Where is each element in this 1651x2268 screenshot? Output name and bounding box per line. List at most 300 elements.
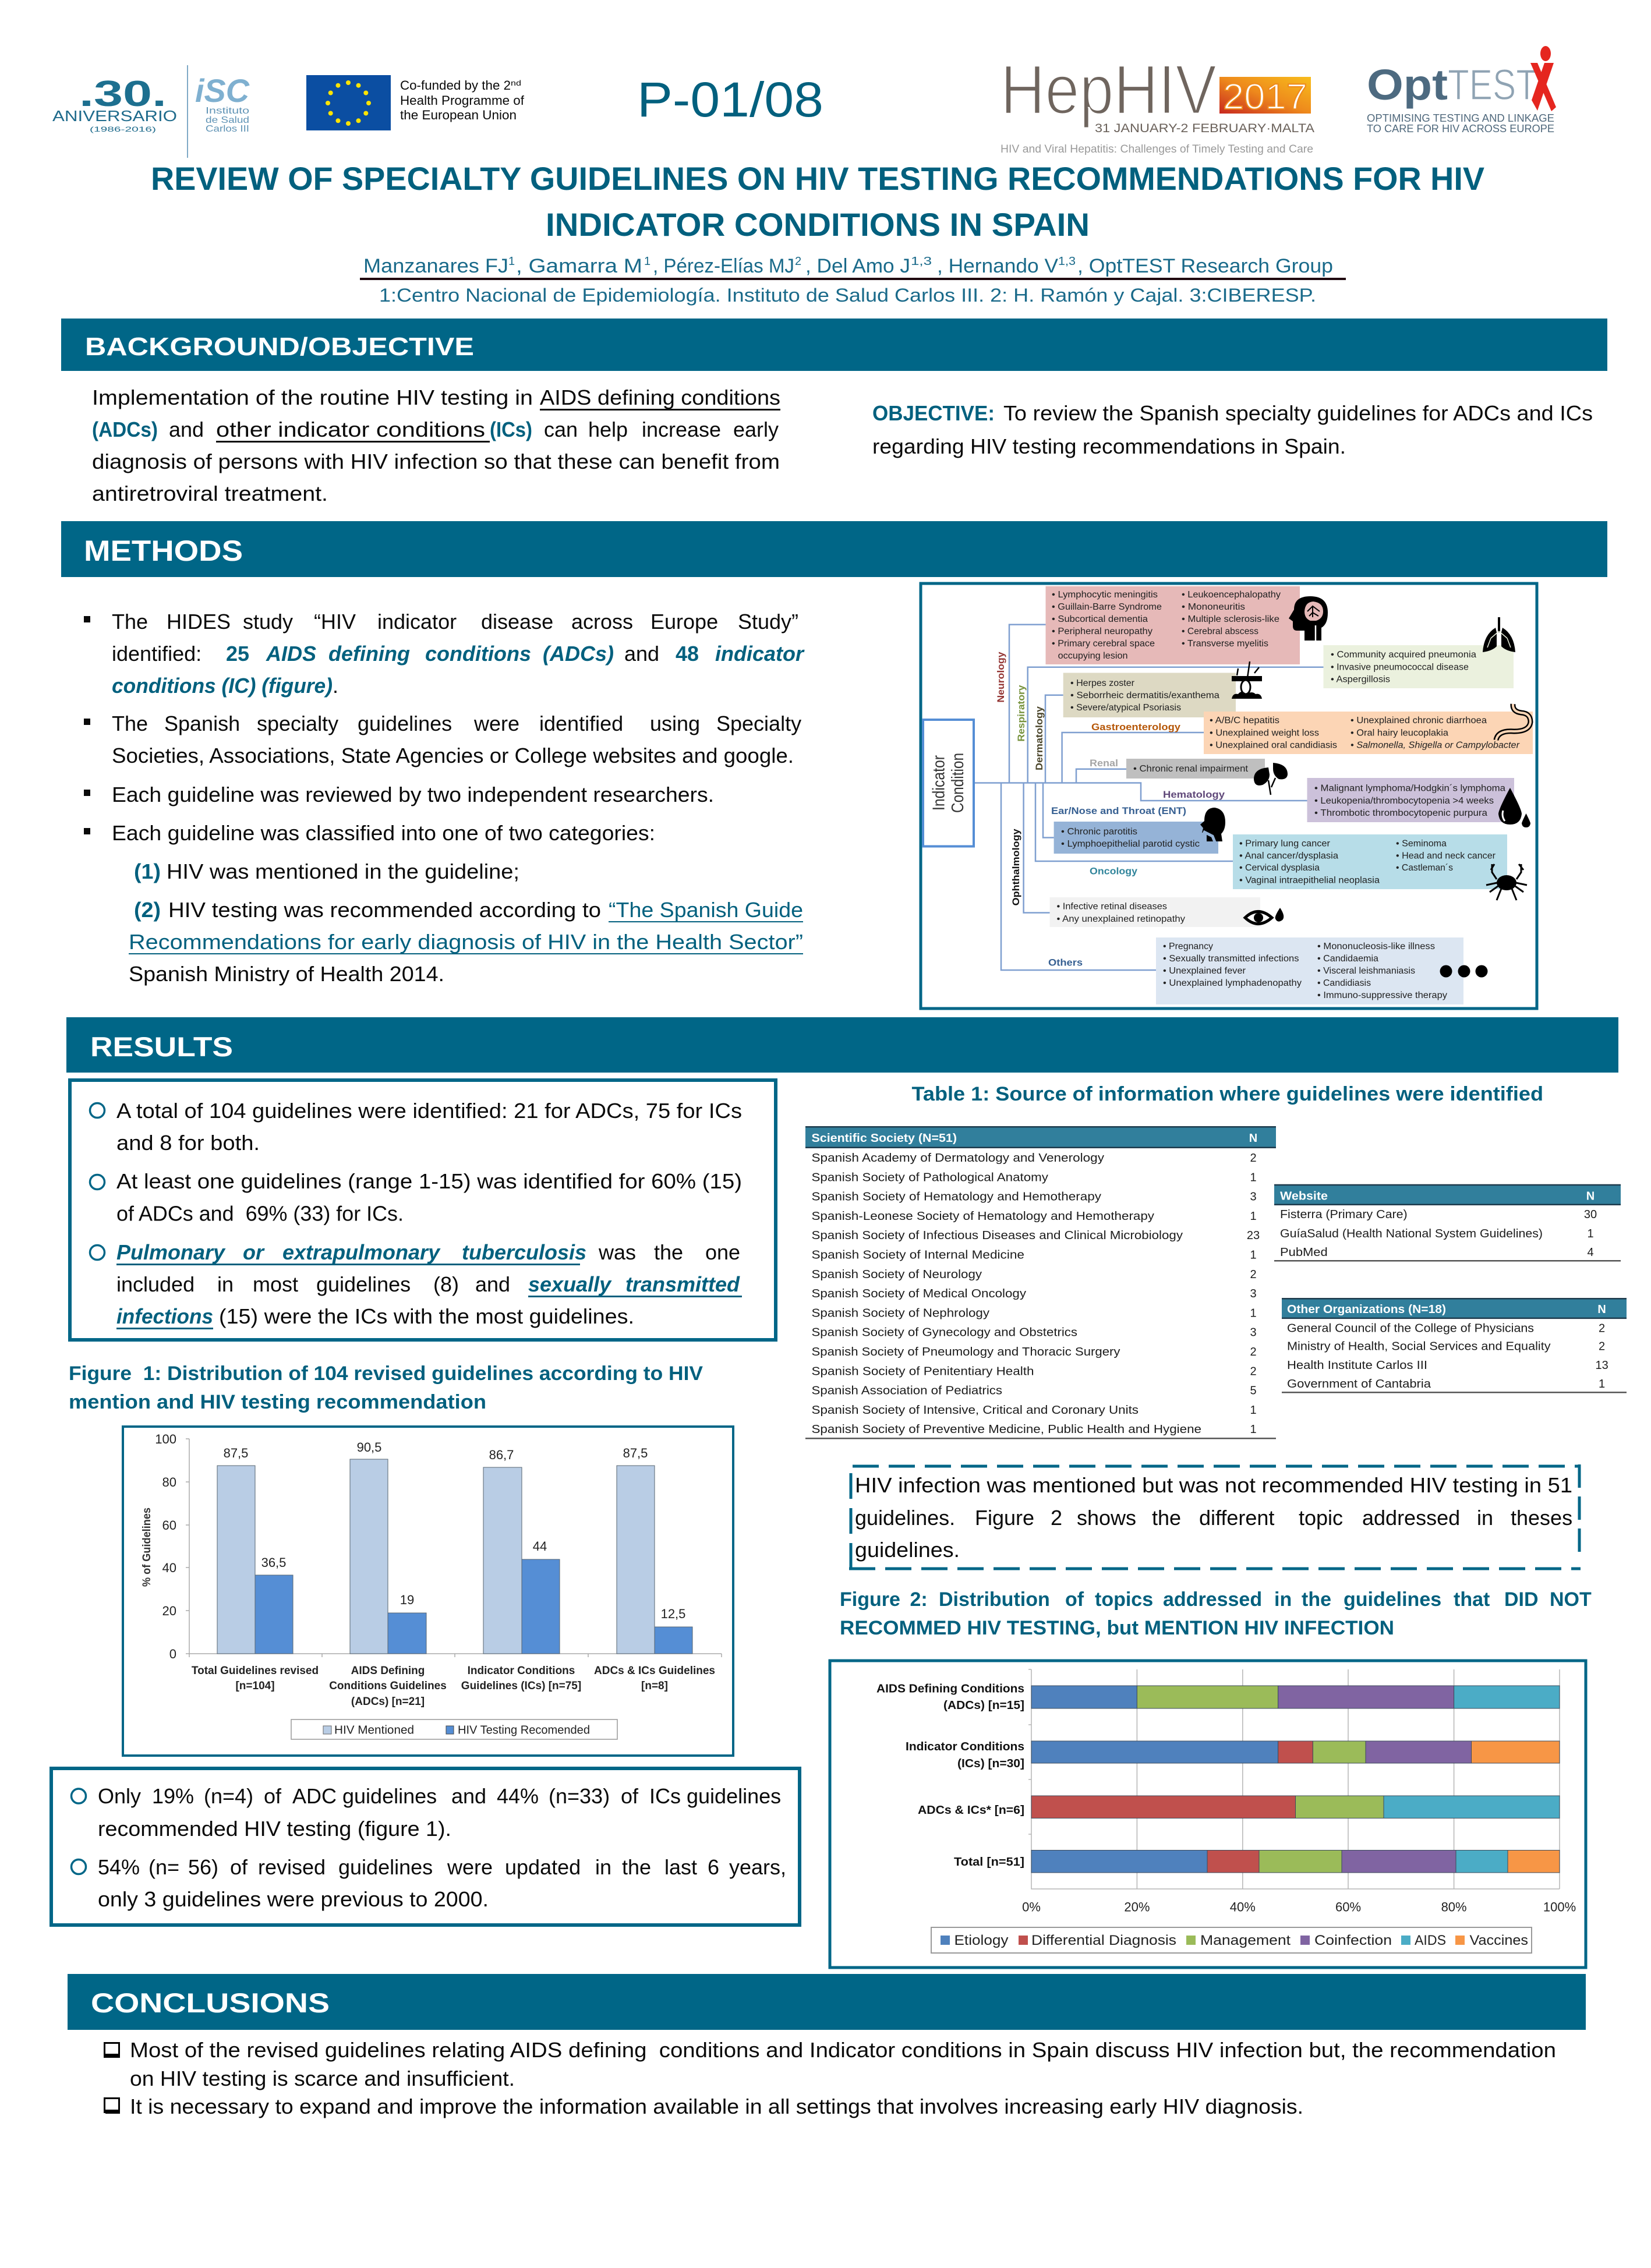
box: renal: • Chronic renal impairment <box>1133 764 1249 774</box>
table: other organizations: Health Institute Carlos III <box>1287 1359 1427 1372</box>
panel: results second findings: (n=4) <box>204 1784 253 1808</box>
co-funded text: nd <box>511 79 521 87</box>
category labels: Ophthalmology <box>1010 829 1021 905</box>
box: neurology: • Cerebral abscess <box>1182 627 1258 636</box>
figure 2 heading: NOT <box>1550 1588 1592 1611</box>
table: scientific society: Spanish Society of Penitentiary Health <box>812 1365 1034 1378</box>
box: neurology: • Subcortical dementia <box>1052 614 1148 624</box>
legend: HIV Testing Recomended <box>458 1724 590 1736</box>
text block: conclusions <box>105 2038 1556 2118</box>
box: oncology: • Anal cancer/dysplasia <box>1239 851 1338 861</box>
panel: results key findings: and <box>475 1272 510 1296</box>
panel: results second findings: updated <box>505 1855 581 1879</box>
y axis: % of Guidelines <box>141 1508 153 1587</box>
text block: methods list: using <box>650 712 700 735</box>
text block: methods list: (1) <box>134 859 161 883</box>
co-funded text <box>400 78 525 122</box>
y axis: 40 <box>162 1561 176 1575</box>
panel: results key findings: sexually <box>528 1272 612 1296</box>
value labels: 90,5 <box>357 1440 381 1455</box>
category labels: Ear/Nose and Throat (ENT) <box>1051 805 1186 816</box>
panel: results second findings: years, <box>729 1855 786 1879</box>
panel: results key findings: tuberculosis <box>462 1240 586 1264</box>
callout: dashed note: Figure <box>975 1506 1034 1530</box>
table: scientific society: 1 <box>1250 1210 1257 1223</box>
panel: results second findings: only 3 guidelines were previous to 2000. <box>98 1887 489 1911</box>
logo: OptTEST: OPTIMISING TESTING AND LINKAGE <box>1367 112 1554 124</box>
icon: lungs <box>1483 617 1515 652</box>
icon: blood drops <box>1498 788 1530 827</box>
box: ENT: • Chronic parotitis <box>1061 827 1137 837</box>
text block: methods list: Study” <box>738 610 798 634</box>
legend <box>931 1927 1532 1953</box>
category labels: Renal <box>1090 758 1118 769</box>
legend: AIDS <box>1415 1933 1446 1948</box>
box: gastroenterology: • Oral hairy leucoplakia <box>1351 728 1448 738</box>
chart: figure 1 bar chart <box>123 1427 733 1756</box>
box: gastroenterology: • Unexplained chronic diarrhoea <box>1351 716 1487 726</box>
table: scientific society: Spanish Society of Pathological Anatomy <box>812 1171 1048 1184</box>
box: gastroenterology: • Unexplained weight loss <box>1210 728 1319 738</box>
row labels: ADCs & ICs* [n=6] <box>918 1804 1024 1817</box>
text block: methods list: Specialty <box>716 712 801 735</box>
panel: results second findings: (n= <box>149 1855 179 1879</box>
logo: ISCIII 30 anniversary <box>52 65 250 158</box>
figure 2 heading: that <box>1454 1588 1490 1611</box>
x axis labels: 60% <box>1335 1899 1361 1915</box>
category labels: AIDS Defining <box>351 1665 425 1677</box>
text block: methods list: study <box>243 610 293 634</box>
logo: OptTEST: TO CARE FOR HIV ACROSS EUROPE <box>1367 123 1554 135</box>
table: other organizations: 2 <box>1599 1340 1605 1353</box>
panel: results second findings: were <box>447 1855 493 1879</box>
box: oncology: • Castleman´s <box>1396 863 1453 873</box>
box: oncology: • Primary lung cancer <box>1239 838 1330 849</box>
icon: crab <box>1486 864 1527 900</box>
panel: results second findings <box>51 1768 800 1925</box>
text block: conclusions: on HIV testing is scarce and insufficient. <box>130 2067 515 2090</box>
text block: methods list: (ADCs) <box>543 642 614 666</box>
icon: head with brain <box>1289 596 1328 641</box>
x axis labels: 0% <box>1022 1899 1041 1915</box>
logo: HepHIV 2017: 2017 <box>1223 77 1307 117</box>
category labels: Respiratory <box>1016 685 1027 742</box>
figure 2 heading: addressed <box>1163 1588 1262 1611</box>
box: oncology <box>1233 834 1507 889</box>
category labels: Gastroenterology <box>1091 721 1181 733</box>
heading: conclusions <box>68 1974 1586 2030</box>
figure 1 heading: Figure 1: Distribution of 104 revised guidelines according to HIV <box>69 1363 703 1385</box>
text block: methods list: Spanish <box>164 712 240 735</box>
box: neurology: occupying lesion <box>1058 651 1128 661</box>
table: other organizations: 1 <box>1599 1378 1605 1390</box>
box: others: • Mononucleosis-like illness <box>1317 942 1435 951</box>
table: scientific society: 3 <box>1250 1326 1257 1339</box>
panel: results second findings: 6 <box>708 1855 719 1879</box>
figure 2 heading: DID <box>1504 1588 1539 1611</box>
x axis labels: 100% <box>1543 1899 1576 1915</box>
box: oncology: • Seminoma <box>1396 838 1447 849</box>
box: respiratory: • Community acquired pneumonia <box>1331 650 1476 660</box>
table: website: GuíaSalud (Health National System Guidelines) <box>1280 1227 1543 1240</box>
panel: results second findings: guidelines <box>687 1784 781 1808</box>
text block: methods list: disease <box>481 610 553 634</box>
logo: ISCIII 30 anniversary: Instituto <box>206 106 249 116</box>
panel: results key findings: (15) were the ICs with the most guidelines. <box>219 1304 634 1328</box>
category labels: Total Guidelines revised <box>192 1665 319 1677</box>
category labels <box>192 1665 715 1708</box>
text block: methods list: defining <box>328 642 410 666</box>
box: ophthalmology <box>1049 897 1260 927</box>
category labels: Dermatology <box>1034 706 1045 770</box>
affiliations: 1:Centro Nacional de Epidemiología. Instituto de Salud Carlos III. 2: H. Ramón y Cajal. 3:CIBERESP. <box>379 285 1316 306</box>
table: other organizations: N <box>1597 1303 1606 1316</box>
text block: methods list: were <box>473 712 519 735</box>
box: gastroenterology <box>1204 712 1533 754</box>
panel: results key findings: Pulmonary <box>116 1240 226 1264</box>
box: others: • Unexplained fever <box>1163 966 1246 976</box>
text block: methods list: HIV was mentioned in the guideline; <box>167 859 519 883</box>
text block: objective: OBJECTIVE: <box>872 401 995 425</box>
text block: methods list: and <box>624 642 659 666</box>
y axis: 80 <box>162 1475 176 1489</box>
table: website: N <box>1586 1190 1595 1203</box>
panel: results key findings: included <box>116 1272 195 1296</box>
panel: results second findings: of <box>264 1784 282 1808</box>
icon: stomach <box>1496 704 1530 740</box>
figure 1 heading: mention and HIV testing recommendation <box>69 1391 486 1413</box>
text block: methods list: identified: <box>112 642 201 666</box>
table: other organizations: General Council of the College of Physicians <box>1287 1322 1534 1335</box>
figure 2 heading: in <box>1274 1588 1292 1611</box>
table: scientific society: Spanish Society of Pneumology and Thoracic Surgery <box>812 1346 1120 1358</box>
box: dermatology: • Herpes zoster <box>1070 678 1134 688</box>
x axis labels: 40% <box>1230 1899 1256 1915</box>
legend: Etiology <box>954 1933 1009 1948</box>
box: dermatology: • Severe/atypical Psoriasis <box>1070 703 1181 713</box>
box: others: • Immuno-suppressive therapy <box>1317 990 1447 1000</box>
table: scientific society: 2 <box>1250 1365 1257 1378</box>
panel: results second findings: of <box>621 1784 639 1808</box>
value labels: 36,5 <box>261 1555 286 1570</box>
value labels: 19 <box>400 1593 414 1607</box>
logo: ISCIII 30 anniversary: (1986-2016) <box>90 125 156 133</box>
box: others: • Sexually transmitted infections <box>1163 954 1299 964</box>
chart: figure 2 stacked bars <box>830 1661 1586 1968</box>
authors <box>360 255 1346 280</box>
table: website: PubMed <box>1280 1246 1328 1259</box>
box: neurology: • Multiple sclerosis-like <box>1182 614 1279 624</box>
table: scientific society: N <box>1249 1132 1257 1145</box>
table: scientific society: Spanish Society of Infectious Diseases and Clinical Microbiology <box>812 1229 1183 1242</box>
table: scientific society: 1 <box>1250 1404 1257 1417</box>
table: other organizations: Government of Cantabria <box>1287 1378 1431 1390</box>
panel: results key findings: most <box>253 1272 298 1296</box>
panel: results second findings: of <box>230 1855 248 1879</box>
table: scientific society: 2 <box>1250 1268 1257 1281</box>
y axis <box>141 1432 176 1661</box>
figure 2 heading: the <box>1302 1588 1331 1611</box>
table: scientific society: Spanish Society of Preventive Medicine, Public Health and Hygiene <box>812 1423 1201 1436</box>
authors: , Del Amo J <box>805 255 910 277</box>
table: scientific society: 3 <box>1250 1287 1257 1300</box>
panel: results second findings: 19% <box>152 1784 194 1808</box>
table: other organizations: 2 <box>1599 1322 1605 1335</box>
table: scientific society: 2 <box>1250 1152 1257 1165</box>
callout: dashed note: guidelines. <box>855 1538 960 1562</box>
table: scientific society: Spanish Society of Hematology and Hemotherapy <box>812 1191 1101 1204</box>
text block: methods list: The <box>112 712 148 735</box>
table: scientific society: Scientific Society (N=51) <box>812 1132 957 1145</box>
text block: objective: regarding HIV testing recommendations in Spain. <box>872 434 1346 458</box>
panel: results second findings: Only <box>98 1784 141 1808</box>
row labels <box>876 1683 1024 1869</box>
box: dermatology: • Seborrheic dermatitis/exanthema <box>1070 691 1219 700</box>
logo: ISCIII 30 anniversary: .30. <box>79 74 167 114</box>
panel: results key findings: guidelines <box>316 1272 411 1296</box>
text block: background: antiretroviral treatment. <box>92 482 328 505</box>
callout: dashed note: the <box>1152 1506 1181 1530</box>
panel: results key findings: one <box>705 1240 740 1264</box>
panel: results second findings: guidelines <box>342 1784 437 1808</box>
text block: methods list: indicator <box>715 642 805 666</box>
row labels: (ADCs) [n=15] <box>943 1699 1024 1712</box>
text block: methods list: identified <box>539 712 623 735</box>
logo: ISCIII 30 anniversary: Carlos III <box>206 124 249 134</box>
row labels: AIDS Defining Conditions <box>876 1683 1024 1696</box>
row labels: (ICs) [n=30] <box>957 1757 1024 1770</box>
category labels: Oncology <box>1090 865 1138 877</box>
logo: HepHIV 2017: 31 JANUARY-2 FEBRUARY·MALTA <box>1095 122 1314 135</box>
callout: dashed note: HIV infection was mentioned but was not recommended HIV testing in 51 <box>855 1473 1572 1497</box>
callout: dashed note: theses <box>1511 1506 1572 1530</box>
category labels: Hematology <box>1163 789 1225 800</box>
panel: results second findings: ICs <box>649 1784 681 1808</box>
panel: results key findings: transmitted <box>625 1272 740 1296</box>
figure: indicator condition diagram <box>921 583 1537 1009</box>
row labels: Total [n=51] <box>954 1856 1024 1869</box>
table: scientific society: 1 <box>1250 1171 1257 1184</box>
table: scientific society: 2 <box>1250 1346 1257 1358</box>
logo: ISCIII 30 anniversary: de Salud <box>206 115 249 125</box>
value labels: 86,7 <box>489 1448 514 1462</box>
text block: methods list: Recommendations for early diagnosis of HIV in the Health Sector” <box>129 930 803 954</box>
title: REVIEW OF SPECIALTY GUIDELINES ON HIV TESTING RECOMMENDATIONS FOR HIV <box>151 160 1484 197</box>
table: other organizations: 13 <box>1595 1359 1608 1372</box>
x axis labels <box>1022 1899 1576 1915</box>
table: scientific society: Spanish Society of Intensive, Critical and Coronary Units <box>812 1404 1139 1417</box>
box: respiratory: • Aspergillosis <box>1331 674 1390 685</box>
heading: background/objective: BACKGROUND/OBJECTIVE <box>85 332 474 361</box>
box: ophthalmology: • Any unexplained retinopathy <box>1056 914 1185 924</box>
panel: results key findings: A total of 104 guidelines were identified: 21 for ADCs, 75 for ICs <box>116 1099 742 1123</box>
figure 2 heading: topics <box>1095 1588 1153 1611</box>
box: others: • Pregnancy <box>1163 942 1213 951</box>
co-funded text: Health Programme of <box>400 93 525 108</box>
text block: methods list: (2) <box>134 898 161 922</box>
panel: results key findings: or <box>243 1240 265 1264</box>
panel: results second findings: 54% <box>98 1855 140 1879</box>
text block: background: early <box>733 417 779 441</box>
value labels: 12,5 <box>661 1607 685 1621</box>
panel: results second findings: and <box>451 1784 486 1808</box>
panel: results key findings: (8) <box>433 1272 459 1296</box>
figure 2 heading: guidelines <box>1344 1588 1441 1611</box>
panel: results second findings: last <box>664 1855 697 1879</box>
legend: Differential Diagnosis <box>1031 1933 1176 1948</box>
panel: results second findings: 44% <box>497 1784 539 1808</box>
legend: Management <box>1200 1933 1291 1948</box>
callout: dashed note: different <box>1199 1506 1274 1530</box>
text block: background: increase <box>642 417 721 441</box>
x axis labels: 20% <box>1124 1899 1150 1915</box>
box: ENT: • Lymphoepithelial parotid cystic <box>1061 839 1200 849</box>
table: scientific society: 5 <box>1250 1385 1257 1397</box>
figure 1 heading <box>69 1363 703 1413</box>
box: gastroenterology: • Salmonella, Shigella or Campylobacter <box>1351 740 1520 750</box>
table: scientific society: Spanish Society of Nephrology <box>812 1307 989 1319</box>
poster number: P-01/08 <box>637 72 823 127</box>
box: respiratory <box>1323 645 1514 688</box>
figure 2 heading: Figure <box>840 1588 900 1611</box>
figure 2 heading: of <box>1065 1588 1084 1611</box>
table: website: Fisterra (Primary Care) <box>1280 1208 1408 1221</box>
box: respiratory: • Invasive pneumococcal disease <box>1331 663 1469 673</box>
bars <box>217 1459 692 1654</box>
text block: background: Implementation of the routine HIV testing in <box>92 385 533 409</box>
value labels: 44 <box>533 1539 547 1554</box>
connector lines <box>974 625 1323 970</box>
figure 2 heading: RECOMMED HIV TESTING, but MENTION HIV INFECTION <box>840 1617 1394 1639</box>
text block: objective: To review the Spanish specialty guidelines for ADCs and ICs <box>1003 401 1593 425</box>
table: scientific society: 1 <box>1250 1423 1257 1436</box>
text block: methods list: HIDES <box>167 610 231 634</box>
panel: results key findings: in <box>217 1272 234 1296</box>
logo: OptTEST: TEST <box>1448 61 1537 109</box>
table: website <box>1274 1184 1621 1261</box>
text block: methods list: AIDS <box>266 642 316 666</box>
indicator condition box <box>923 720 974 847</box>
category labels: Indicator Conditions <box>468 1665 575 1677</box>
table: website: Website <box>1280 1190 1328 1203</box>
table: scientific society: 3 <box>1250 1191 1257 1204</box>
box: others: • Candidaemia <box>1317 954 1378 964</box>
authors: 1,3 <box>1058 255 1076 268</box>
text block: methods list: across <box>571 610 633 634</box>
box: renal <box>1126 759 1265 779</box>
category labels <box>995 652 1225 968</box>
logo: OptTEST <box>1367 46 1556 135</box>
box: ENT <box>1054 822 1218 854</box>
value labels <box>224 1440 685 1621</box>
callout: dashed note: shows <box>1077 1506 1136 1530</box>
text block: background: (ICs) <box>490 417 532 441</box>
text block: background: other indicator conditions <box>216 417 485 441</box>
box: gastroenterology: • A/B/C hepatitis <box>1210 716 1279 726</box>
authors: 1 <box>644 255 650 268</box>
text block: methods list <box>84 610 805 986</box>
box: others: • Visceral leishmaniasis <box>1317 966 1415 976</box>
title <box>151 160 1484 243</box>
authors: , OptTEST Research Group <box>1077 255 1333 277</box>
panel: results key findings: infections <box>116 1304 213 1328</box>
co-funded text: Co-funded by the 2 <box>400 78 511 93</box>
x axis labels: 80% <box>1441 1899 1467 1915</box>
box: others <box>1156 937 1463 1004</box>
panel: results second findings: ADC <box>292 1784 337 1808</box>
text block: methods list: indicator <box>377 610 457 634</box>
category labels: [n=8] <box>641 1680 668 1692</box>
legend <box>291 1719 617 1739</box>
panel: results second findings: guidelines <box>338 1855 433 1879</box>
heading: methods <box>61 521 1607 577</box>
indicator condition box: Indicator <box>930 755 949 811</box>
panel: results second findings: the <box>622 1855 651 1879</box>
heading: results <box>66 1017 1618 1073</box>
panel: results key findings: and 8 for both. <box>116 1131 260 1155</box>
figure 2 heading: 2: <box>910 1588 928 1611</box>
panel: results key findings: the <box>654 1240 683 1264</box>
authors: , Hernando V <box>937 255 1058 277</box>
text block: background: help <box>588 417 628 441</box>
text block: methods list: 25 <box>226 642 249 666</box>
heading: conclusions: CONCLUSIONS <box>91 1987 330 2018</box>
table: other organizations: Other Organizations (N=18) <box>1287 1303 1446 1316</box>
indicator condition box: Condition <box>949 753 967 813</box>
icon: eye <box>1245 908 1284 924</box>
category labels: ADCs & ICs Guidelines <box>594 1665 715 1677</box>
text block: methods list: . <box>333 674 338 698</box>
text block: methods list: HIV testing was recommended according to <box>168 898 601 922</box>
table: other organizations <box>1282 1298 1627 1393</box>
panel: results second findings: in <box>595 1855 611 1879</box>
stacked bars <box>1031 1686 1560 1873</box>
panel: results key findings: extrapulmonary <box>282 1240 441 1264</box>
table: scientific society: Spanish Academy of Dermatology and Venerology <box>812 1152 1104 1165</box>
text block: background: AIDS defining conditions <box>540 385 780 409</box>
callout: dashed note: topic <box>1299 1506 1343 1530</box>
icon: three dots <box>1440 965 1487 977</box>
table: scientific society: Spanish Society of Internal Medicine <box>812 1248 1024 1261</box>
box: others: • Unexplained lymphadenopathy <box>1163 978 1302 988</box>
heading: background/objective <box>61 319 1607 371</box>
text block: objective <box>872 401 1593 458</box>
figure 2 heading: Distribution <box>939 1588 1050 1611</box>
table: scientific society: Spanish Society of Neurology <box>812 1268 982 1281</box>
heading: methods: METHODS <box>84 535 243 567</box>
logo: HepHIV 2017: HIV and Viral Hepatitis: Challenges of Timely Testing and Care <box>1001 143 1313 155</box>
table: website: 30 <box>1584 1208 1597 1221</box>
logo: ISCIII 30 anniversary: ANIVERSARIO <box>52 107 177 125</box>
box: hematology: • Malignant lymphoma/Hodgkin´s lymphoma <box>1314 784 1505 793</box>
table: other organizations: Ministry of Health, Social Services and Equality <box>1287 1340 1551 1353</box>
box: neurology: • Guillain-Barre Syndrome <box>1052 602 1162 612</box>
heading: results: RESULTS <box>90 1031 233 1062</box>
box: oncology: • Vaginal intraepithelial neoplasia <box>1239 876 1380 886</box>
text block: methods list: “The Spanish Guide <box>609 898 803 922</box>
text block: background: can <box>544 417 578 441</box>
text block: methods list: Europe <box>650 610 718 634</box>
category labels: Conditions Guidelines <box>329 1680 447 1692</box>
logo: EU flag <box>306 75 391 130</box>
callout: dashed note: guidelines. <box>855 1506 955 1530</box>
authors: , Pérez-Elías MJ <box>653 255 794 277</box>
panel: results second findings: 56) <box>188 1855 218 1879</box>
table: scientific society <box>805 1126 1276 1439</box>
table: website: 4 <box>1587 1246 1594 1259</box>
table: scientific society: 1 <box>1250 1307 1257 1319</box>
header logos <box>52 46 1556 158</box>
